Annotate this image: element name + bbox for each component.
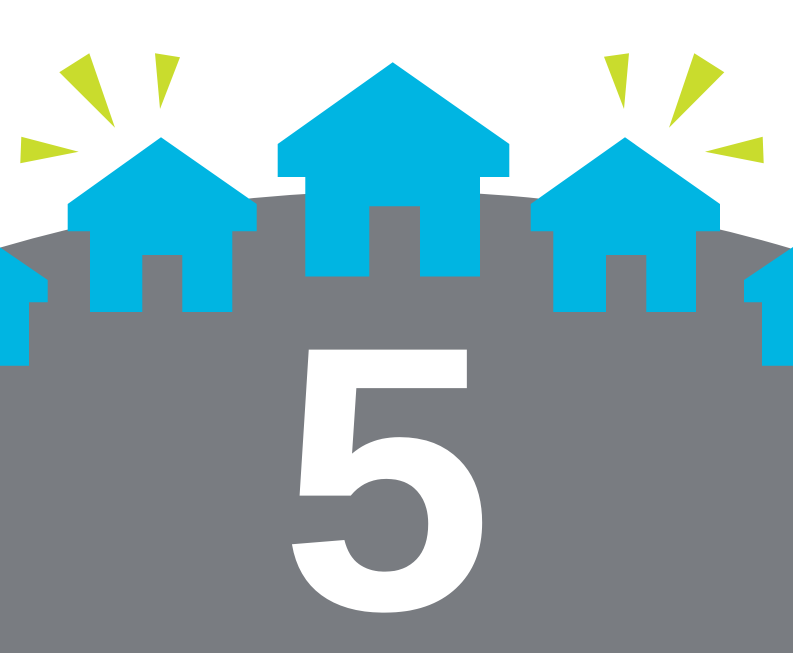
icon: left sparks [20,53,180,163]
icon: left house [68,137,257,312]
hill [0,191,793,653]
icon: far right house [744,247,793,366]
icon: right sparks [604,53,764,163]
icon: far left house [0,247,48,366]
icon: center house [278,62,509,276]
icon: right house [531,137,720,312]
